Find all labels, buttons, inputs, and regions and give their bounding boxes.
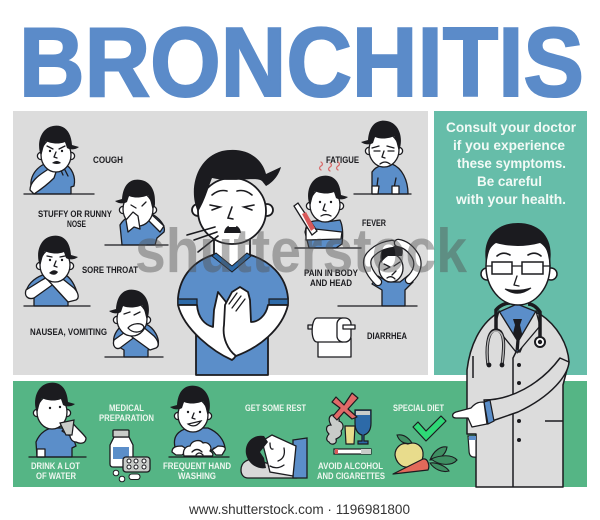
label: diarrhea: DIARRHEA	[367, 331, 407, 341]
label: fatigue: FATIGUE	[326, 155, 359, 165]
label: cough: COUGH	[93, 155, 123, 165]
label: frequent hand washing: FREQUENT HAND	[163, 461, 231, 471]
label: drink a lot of water: DRINK A LOT	[31, 461, 80, 471]
text: consult message	[446, 120, 576, 208]
icon: toilet paper	[308, 318, 355, 357]
figure: sleeping person	[241, 435, 307, 478]
label: get some rest: GET SOME REST	[245, 403, 306, 413]
text: consult message: Consult your doctor	[446, 120, 576, 136]
watermark: shutterstock	[135, 217, 467, 286]
text: consult message: these symptoms.	[457, 156, 566, 172]
head	[481, 268, 493, 280]
footer: image reference: www.shutterstock.com · 1196981800	[188, 502, 410, 517]
figure: pain in body and head	[338, 241, 417, 306]
icon: medicine	[110, 430, 150, 482]
icon: check mark	[413, 416, 446, 441]
figure: cough	[24, 126, 94, 194]
figure: main coughing man	[178, 150, 288, 375]
pointing arm	[484, 358, 569, 421]
figure: drink water	[29, 383, 86, 457]
icon: apple and carrot	[393, 435, 457, 474]
icon: alcohol and cigarettes	[327, 393, 371, 454]
label: pain in body and head: AND HEAD	[310, 278, 352, 288]
label: drink a lot of water: OF WATER	[36, 471, 76, 481]
text: consult message: if you experience	[453, 138, 565, 154]
text: consult message: with your health.	[455, 192, 566, 208]
figure: fever	[294, 162, 361, 248]
label: stuffy or runny nose: NOSE	[67, 219, 86, 229]
label: frequent hand washing	[163, 461, 231, 481]
figure: nausea	[105, 290, 163, 357]
panel: consult doctor	[434, 111, 587, 375]
figure: hand washing	[169, 386, 229, 457]
figure: doctor	[453, 223, 569, 487]
label: sore throat: SORE THROAT	[82, 265, 138, 275]
label: pain in body and head: PAIN IN BODY	[304, 268, 358, 278]
label: frequent hand washing: WASHING	[178, 471, 216, 481]
stethoscope	[496, 303, 540, 338]
figure: stuffy nose	[105, 180, 168, 245]
label: nausea, vomiting: NAUSEA, VOMITING	[30, 327, 107, 337]
label: stuffy or runny nose	[38, 209, 112, 229]
label: medical preparation: MEDICAL	[109, 403, 144, 413]
figure: fatigue	[354, 121, 411, 194]
label: avoid alcohol and cigarettes: AVOID ALCOHOL	[318, 461, 383, 471]
label: avoid alcohol and cigarettes: AND CIGARETTES	[317, 471, 385, 481]
panel: symptoms	[13, 111, 428, 375]
label: drink a lot of water	[31, 461, 80, 481]
label: medical preparation: PREPARATION	[99, 413, 154, 423]
label: medical preparation	[99, 403, 154, 423]
label: special diet: SPECIAL DIET	[393, 403, 444, 413]
text: consult message: Be careful	[477, 174, 542, 190]
label: pain in body and head	[304, 268, 358, 288]
label: stuffy or runny nose: STUFFY OR RUNNY	[38, 209, 112, 219]
figure: sore throat	[24, 236, 90, 306]
label: fever: FEVER	[362, 218, 386, 228]
panel: recommendations	[13, 381, 587, 487]
label: avoid alcohol and cigarettes	[317, 461, 385, 481]
